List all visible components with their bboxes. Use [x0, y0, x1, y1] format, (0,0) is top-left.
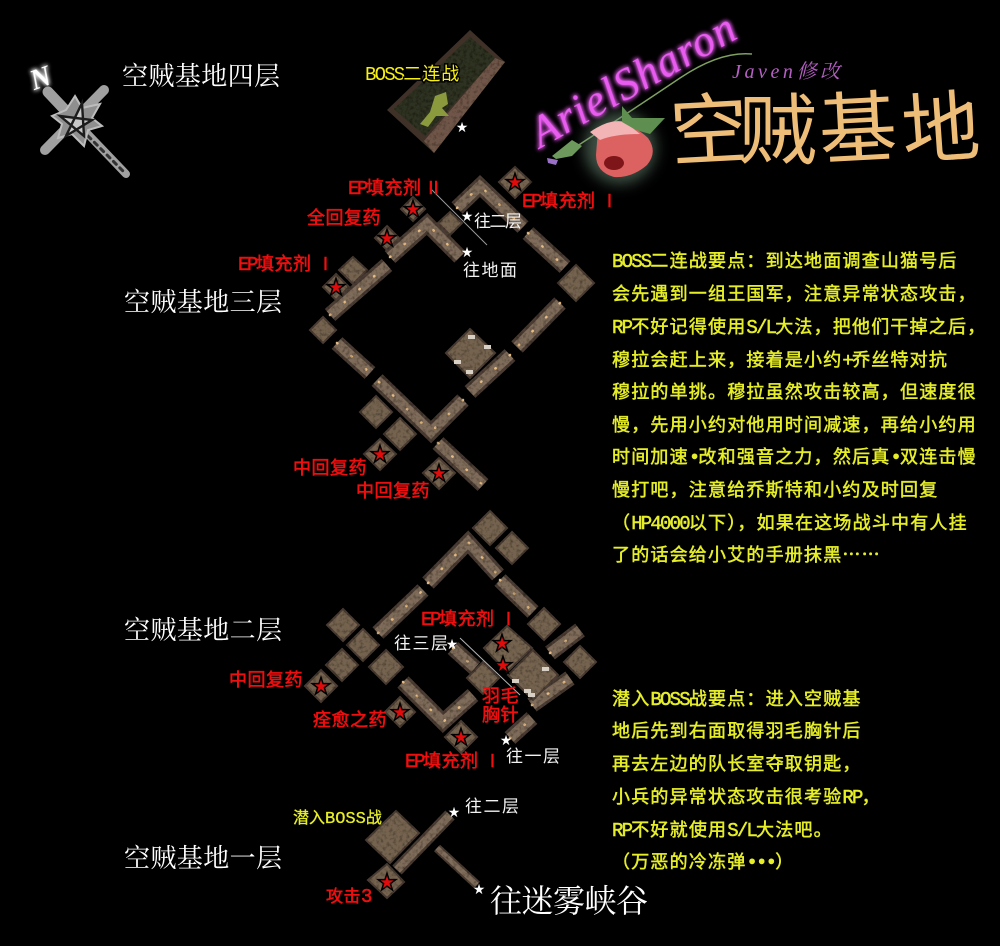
rooms: third floor: [310, 167, 594, 489]
heading: third floor: 空贼基地三层: [124, 288, 282, 317]
text block: boss double battle tips: RP不好记得使用S/L大法，把他们干掉之后，: [612, 313, 986, 339]
item stars: third floor: ★: [328, 278, 344, 298]
corridors: second floor: [378, 542, 580, 738]
text block: boss double battle tips: [612, 247, 986, 567]
labels: third floor: EP填充剂Ⅱ: [348, 174, 443, 200]
logo: calligraphy title: 地: [899, 82, 983, 176]
item stars: third floor: ★: [507, 173, 523, 193]
exit stars: second floor: [446, 637, 512, 749]
item stars: third floor: [328, 173, 523, 484]
labels: first floor: 往迷雾峡谷: [490, 883, 648, 919]
text block: boss double battle tips: 慢打吧，注意给乔斯特和小约及时回复: [612, 476, 938, 502]
labels: third floor: [238, 174, 619, 503]
room furniture: third floor: [454, 335, 491, 374]
logo: ArielSharon neon signature: ArielSharon: [518, 3, 744, 158]
exit stars: first floor: ★: [473, 882, 485, 898]
compass north letter: N: [25, 60, 57, 97]
label: boss double battle: BOSS二连战: [365, 60, 460, 86]
labels: third floor: EP填充剂 Ⅰ: [522, 187, 619, 213]
text block: boss double battle tips: （HP4000以下），如果在这场战斗中有人挂: [612, 509, 968, 535]
text block: infiltration boss tips: [612, 685, 881, 874]
item stars: second floor: [313, 634, 511, 748]
labels: third floor: EP填充剂 Ⅰ: [238, 250, 335, 276]
star: fourth floor exit: ★: [456, 120, 468, 136]
labels: second floor: 胸针: [482, 701, 519, 727]
exit stars: second floor: ★: [500, 733, 512, 749]
logo: calligraphy title: 空: [668, 85, 750, 177]
guide line: third floor: [430, 188, 487, 245]
rooms: second floor: [305, 511, 596, 753]
map: second floor: [305, 511, 596, 753]
guide line: second floor: [460, 638, 520, 695]
labels: third floor: 中回复药: [293, 454, 367, 480]
labels: third floor: 往地面: [463, 261, 517, 280]
item stars: second floor: ★: [494, 634, 510, 654]
text block: boss double battle tips: 时间加速•改和强音之力，然后真•双连击慢: [612, 443, 977, 469]
labels: second floor: 痊愈之药: [313, 706, 387, 732]
text block: boss double battle tips: 了的话会给小艾的手册抹黑……: [612, 541, 881, 567]
heading: first floor: 空贼基地一层: [124, 844, 282, 873]
heading: fourth floor: 空贼基地四层: [122, 62, 280, 91]
labels: third floor: 中回复药: [356, 477, 430, 503]
logo: Javen credit: Javen修改: [732, 61, 843, 83]
logo: calligraphy title: 基: [817, 83, 899, 175]
item stars: third floor: ★: [379, 229, 395, 249]
item stars: second floor: ★: [392, 703, 408, 723]
text block: infiltration boss tips: 潜入BOSS战要点：进入空贼基: [612, 685, 862, 711]
exit stars: first floor: [448, 805, 485, 898]
labels: second floor: 往一层: [506, 747, 560, 766]
compass cross: [45, 90, 126, 174]
labels: third floor: 往二层: [474, 212, 522, 231]
labels: first floor: 往二层: [465, 797, 519, 816]
labels: first floor: [293, 797, 648, 919]
labels: second floor: EP填充剂 Ⅰ: [405, 747, 502, 773]
labels: second floor: 中回复药: [229, 666, 303, 692]
text block: boss double battle tips: 慢，先用小约对他用时间减速，再给小约用: [612, 411, 977, 437]
labels: second floor: 羽毛: [482, 682, 519, 708]
corridors: first floor: [397, 815, 477, 885]
logo: rose glow: [584, 112, 656, 184]
text block: infiltration boss tips: 小兵的异常状态攻击很考验RP，: [612, 783, 881, 809]
text block: boss double battle tips: 会先遇到一组王国军，注意异常状态攻击，: [612, 280, 977, 306]
item stars: third floor: ★: [405, 200, 421, 220]
text block: boss double battle tips: BOSS二连战要点：到达地面调查山猫号后: [612, 247, 958, 273]
exit stars: second floor: ★: [446, 637, 458, 653]
map: third floor: [310, 167, 594, 489]
item stars: second floor: ★: [453, 728, 469, 748]
logo: rose flower: [547, 106, 665, 177]
text block: infiltration boss tips: （万恶的冷冻弹•••）: [612, 848, 794, 874]
item stars: second floor: ★: [495, 656, 511, 676]
exit stars: third floor: [461, 209, 473, 261]
rooms: first floor: [366, 811, 419, 898]
exit stars: first floor: ★: [448, 805, 460, 821]
item star: first floor: ★: [379, 873, 395, 893]
text block: boss double battle tips: 穆拉的单挑。穆拉虽然攻击较高，但速度很: [612, 378, 977, 404]
labels: second floor: 往三层: [394, 634, 448, 653]
exit stars: third floor: ★: [461, 245, 473, 261]
labels: first floor: 攻击3: [326, 882, 372, 908]
text block: boss double battle tips: 穆拉会赶上来，接着是小约+乔丝特对抗: [612, 346, 948, 372]
logo: ArielSharon rose and title: [518, 3, 983, 184]
map: first floor: [366, 811, 477, 898]
compass icon: [25, 60, 126, 174]
logo: rose stem: [568, 54, 752, 152]
map: fourth floor boss room: [387, 30, 505, 153]
room furniture: second floor: [512, 667, 549, 697]
labels: first floor: 潜入BOSS战: [293, 804, 382, 829]
labels: second floor: EP填充剂 Ⅰ: [421, 605, 518, 631]
labels: second floor: [229, 605, 560, 773]
item stars: third floor: ★: [431, 464, 447, 484]
text block: infiltration boss tips: 地后先到右面取得羽毛胸针后: [612, 717, 862, 743]
labels: third floor: 全回复药: [307, 204, 381, 230]
heading: second floor: 空贼基地二层: [124, 616, 282, 645]
corridors: third floor: [330, 186, 565, 485]
item stars: third floor: ★: [372, 445, 388, 465]
item stars: second floor: ★: [313, 677, 329, 697]
logo: calligraphy title: 贼: [739, 87, 817, 175]
text block: infiltration boss tips: RP不好就使用S/L大法吧。: [612, 816, 833, 842]
exit stars: third floor: ★: [461, 209, 473, 225]
logo: calligraphy title: [668, 82, 983, 177]
text block: infiltration boss tips: 再去左边的队长室夺取钥匙，: [612, 750, 862, 776]
